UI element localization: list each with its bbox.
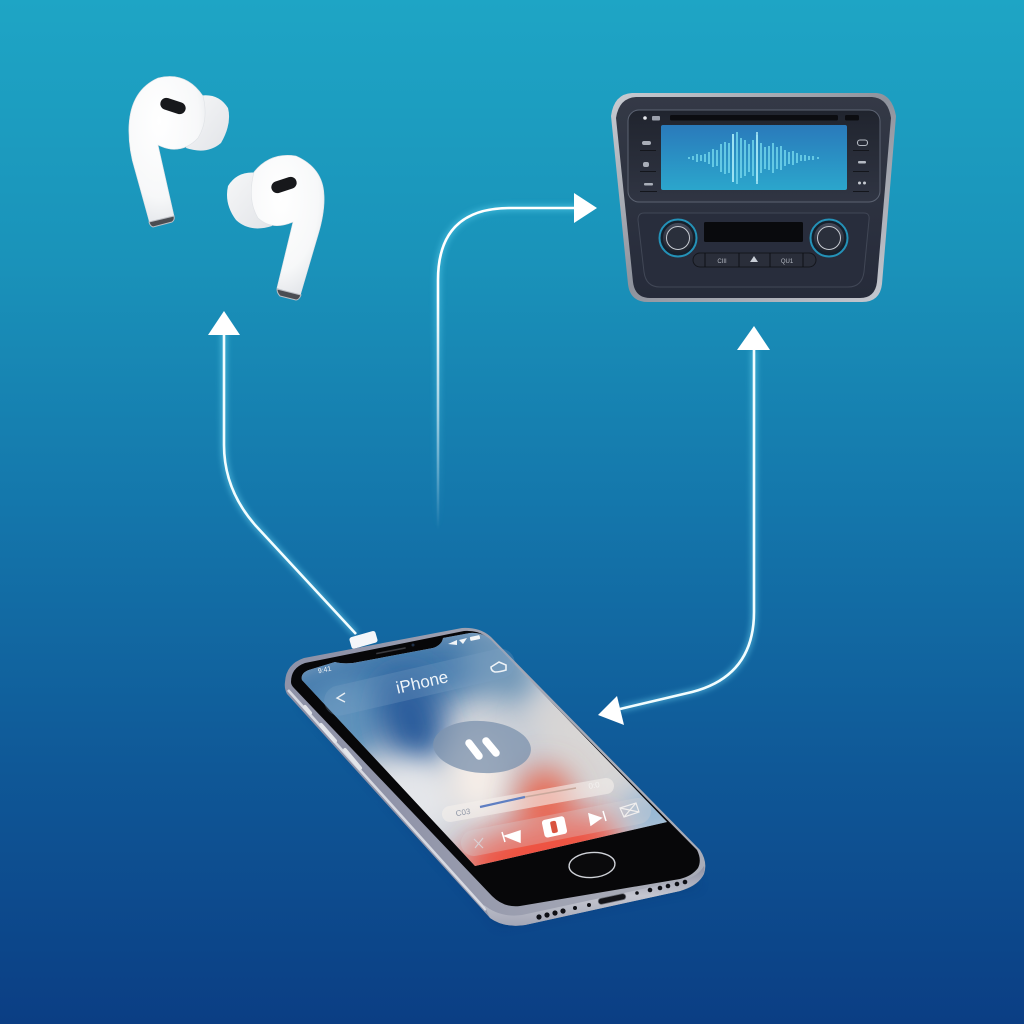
progress pill: 0:0 (588, 780, 601, 791)
header band (321, 646, 518, 719)
metal body (285, 628, 705, 926)
arrow: two-way between car stereo and iPhone (598, 326, 770, 725)
pause icon (469, 741, 496, 756)
stem tip (277, 289, 301, 300)
playback controls pill (474, 803, 639, 848)
status bar: 9:41 (317, 666, 332, 675)
right knob (810, 220, 848, 256)
lower body shade (484, 866, 704, 926)
ear tip (186, 95, 229, 151)
button row (693, 253, 816, 267)
icon: status badge (491, 662, 506, 672)
dark face (616, 97, 891, 298)
ear tip (227, 173, 272, 228)
progress pill: C03 (455, 807, 472, 818)
speaker slot (159, 96, 187, 116)
side buttons (305, 707, 360, 768)
stem and head (251, 155, 324, 296)
side rail highlight (288, 690, 486, 910)
progress pill (450, 780, 606, 818)
icon: shuffle (474, 838, 483, 848)
pause disc (431, 718, 533, 776)
screen artwork (302, 632, 667, 866)
speaker slot (270, 175, 298, 195)
lower panel (638, 213, 869, 287)
icon: screen box (620, 803, 639, 817)
phone drop shadow (300, 700, 700, 925)
left side buttons (640, 141, 657, 192)
icon: back chevron (337, 693, 345, 702)
black display (704, 222, 803, 242)
left knob (660, 220, 696, 256)
icon: left earbud (129, 76, 229, 227)
stem and head (129, 76, 205, 224)
upper panel (628, 110, 880, 202)
disc slot (670, 115, 838, 120)
iPhone (284, 628, 706, 926)
arrow: iPhone to AirPods (208, 311, 356, 634)
status bar (317, 635, 480, 675)
lightning plug (349, 630, 378, 649)
label: iPhone: iPhone (394, 667, 450, 698)
icon: stop button (541, 816, 568, 838)
screen (661, 125, 847, 190)
lightning port (598, 893, 626, 905)
button row: CIII (717, 259, 727, 265)
icon: next (589, 811, 606, 825)
waveform (689, 132, 818, 184)
black glass (291, 631, 700, 906)
silver bezel (611, 93, 896, 302)
home button (568, 851, 616, 879)
notch speaker and camera (376, 644, 414, 654)
status light and small button (643, 116, 660, 120)
icon: previous (502, 831, 520, 842)
arrow: iPhone to car stereo, fading tail (438, 193, 597, 530)
stem tip (149, 216, 174, 227)
car stereo (611, 93, 896, 302)
speaker holes (536, 880, 687, 920)
right side buttons (853, 140, 869, 192)
icon: right earbud (227, 155, 324, 300)
button row: QU1 (781, 259, 794, 265)
